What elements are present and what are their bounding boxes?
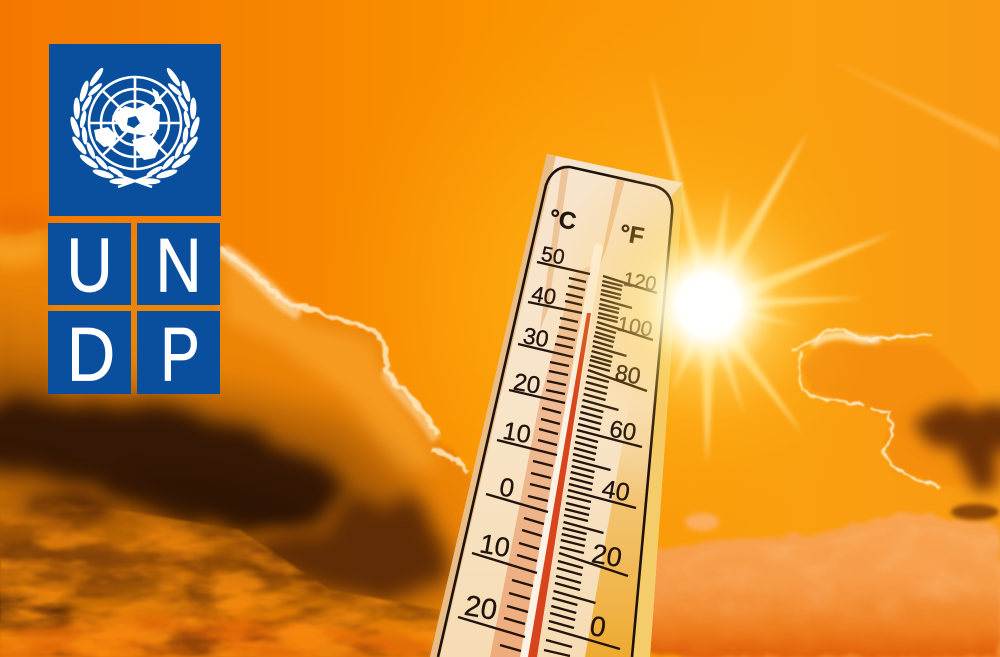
logo emblem panel — [49, 44, 221, 216]
fahrenheit labels: 80 — [613, 359, 643, 389]
cloud lower left dark masses — [25, 490, 120, 522]
thermometer — [430, 154, 683, 657]
thermometer yellow right edge — [633, 183, 683, 657]
cloud body — [0, 228, 480, 657]
logo tile: U — [48, 222, 131, 308]
logo tile: P — [137, 311, 220, 397]
celsius labels: 10 — [501, 417, 533, 449]
thermometer glass tube — [520, 244, 603, 657]
cloud brown halo — [0, 380, 450, 610]
sun glow — [538, 135, 878, 475]
fahrenheit labels: 20 — [589, 538, 624, 573]
cloud bright rim — [222, 248, 468, 474]
thermometer wood edge — [430, 154, 556, 657]
cloud main dark band — [0, 402, 345, 526]
logo tile: D — [48, 311, 131, 397]
celsius major ticks — [458, 262, 590, 637]
thermometer red mercury column — [528, 313, 591, 657]
icon: UN emblem continents — [94, 88, 162, 160]
cloud pale upper-left crest — [0, 234, 46, 268]
cloud lower right dark mass — [225, 495, 442, 600]
logo tile: D: D — [67, 313, 115, 397]
cloud bright patches along right rim — [385, 372, 436, 440]
fahrenheit labels: 0 — [588, 610, 608, 643]
fahrenheit minor ticks — [544, 281, 632, 656]
celsius labels: 20 — [511, 369, 542, 400]
clouds: left storm cloud — [0, 228, 480, 657]
cloud left shading — [0, 270, 60, 450]
logo tile: N — [137, 222, 220, 308]
cloud highlight texture — [0, 490, 440, 657]
celsius labels: 10 — [477, 528, 512, 563]
icon: UN emblem right wreath — [138, 66, 201, 184]
fahrenheit labels — [588, 220, 658, 643]
celsius labels: 20 — [462, 590, 499, 627]
logo tile: P: P — [160, 312, 200, 397]
cloud warm bottom glow — [0, 615, 430, 657]
cloud body — [800, 342, 1000, 490]
small cloud puff — [685, 513, 719, 531]
fahrenheit labels: °F — [618, 220, 646, 251]
fahrenheit labels: 60 — [607, 416, 638, 447]
thermometer wood board — [430, 154, 683, 657]
thermometer inner frame — [438, 167, 672, 657]
thermometer peach grain band — [490, 266, 590, 657]
icon: UN emblem left wreath — [69, 66, 132, 184]
celsius labels: 0 — [497, 471, 517, 503]
logo: UNDP — [48, 44, 221, 397]
celsius labels — [462, 204, 578, 627]
icon: UN emblem globe — [89, 77, 181, 169]
clouds: upper right cloud — [685, 329, 1000, 531]
cloud soft glow under rim — [222, 252, 440, 470]
cloud streak texture — [0, 480, 440, 657]
celsius labels: 30 — [521, 322, 551, 352]
icon: UN emblem crossed stems — [118, 175, 152, 187]
celsius labels: 40 — [530, 281, 558, 310]
logo tile: N: N — [155, 222, 202, 308]
cloud pale crest — [222, 250, 300, 314]
celsius labels: °C — [547, 204, 578, 236]
thermometer yellow grain band — [585, 400, 654, 657]
cloud dark core — [908, 402, 1000, 490]
fahrenheit major ticks — [548, 276, 657, 649]
fahrenheit labels: 100 — [616, 313, 654, 341]
sun rays behind thermometer — [650, 70, 895, 464]
fahrenheit labels: 120 — [621, 268, 658, 296]
cloud bright lace rim — [793, 329, 938, 488]
logo tile: U: U — [66, 222, 113, 308]
celsius minor ticks — [500, 278, 586, 651]
celsius labels: 50 — [539, 243, 566, 269]
fahrenheit labels: 40 — [600, 475, 632, 507]
clouds: lower right peach cloud — [640, 512, 1000, 657]
